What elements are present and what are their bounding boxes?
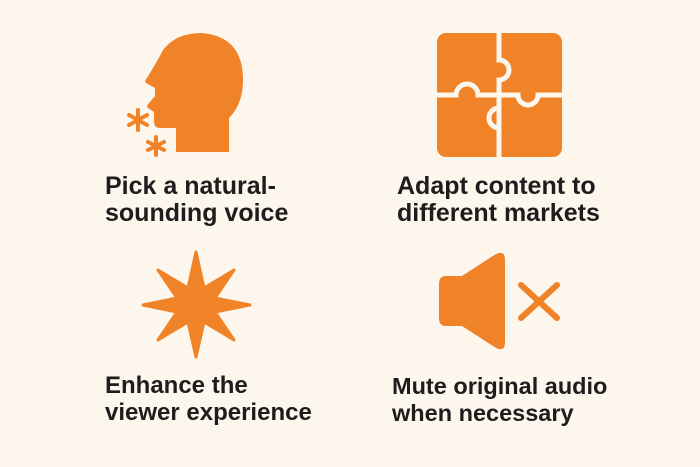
text: pick voice (105, 172, 288, 227)
text: adapt content: different markets (397, 199, 600, 227)
text: mute audio: Mute original audio (392, 373, 607, 399)
icon: star burst (143, 252, 250, 357)
text: pick voice: Pick a natural- (105, 172, 276, 200)
icon: muted speaker (439, 253, 557, 349)
icon: puzzle (437, 33, 562, 157)
text: enhance experience: Enhance the (105, 372, 248, 399)
text: adapt content (397, 172, 600, 227)
icon: head speaking (129, 33, 243, 155)
text: pick voice: sounding voice (105, 199, 288, 227)
text: adapt content: Adapt content to (397, 172, 596, 200)
text: mute audio: when necessary (392, 400, 574, 426)
text: enhance experience (105, 372, 312, 426)
text: enhance experience: viewer experience (105, 399, 312, 426)
text: mute audio (392, 373, 607, 426)
